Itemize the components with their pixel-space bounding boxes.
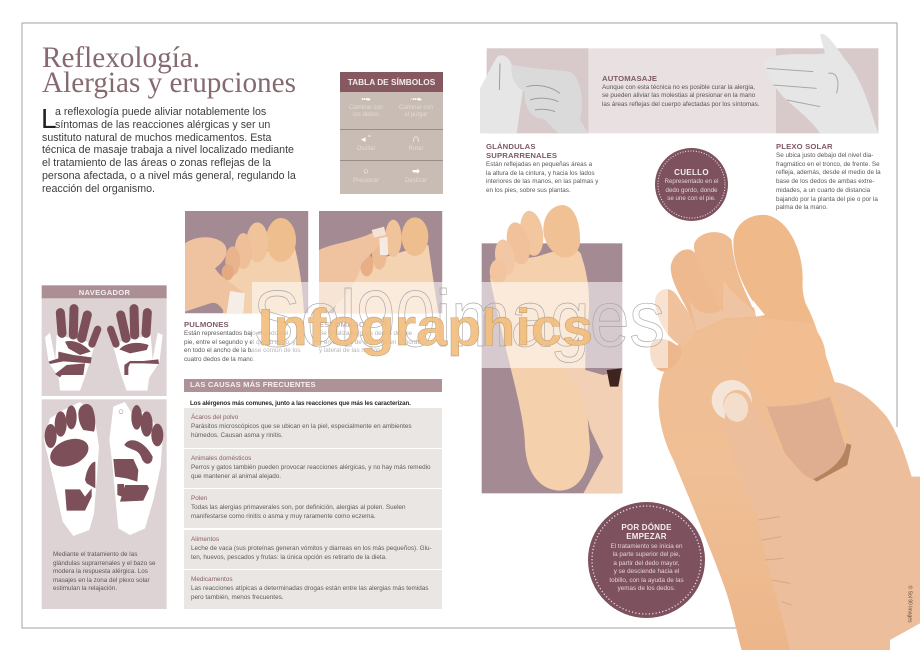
text: plexo solar: bajando por la planta del pie o por la <box>776 196 878 203</box>
symbol: presionar <box>353 166 379 184</box>
right foot map <box>109 402 163 535</box>
heading: causas: LAS CAUSAS MÁS FRECUENTES <box>190 380 316 389</box>
icon: open hand pressing palm <box>763 34 878 133</box>
symbol: caminar con los dedos: Caminar con <box>349 104 383 110</box>
intro text block: persona afectada, o a nivel más general, regulando la <box>42 170 296 182</box>
row: ácaros del polvo <box>184 408 442 448</box>
text: glándulas suprarrenales: interiores de las manos, en las palmas y <box>486 178 598 185</box>
text: pulmones: pie, entre el segundo y el quinto dedo, y <box>184 339 296 346</box>
left hand map <box>45 309 98 391</box>
text: plexo solar: midades, a un cuarto de distancia <box>776 187 870 194</box>
intro text block: el tratamiento de las áreas o zonas reflejas de la <box>42 157 271 169</box>
divider row <box>340 129 443 130</box>
panel: tabla de símbolos <box>340 72 443 194</box>
callout: por dónde empezar: yemas de los dedos. <box>618 585 675 592</box>
text: plexo solar <box>776 142 881 211</box>
symbol: presionar: ○ <box>363 166 369 176</box>
left foot map <box>44 402 99 536</box>
text: second column: y en la zona de la mano, en el borde <box>319 339 421 346</box>
row: medicamentos: pero también, menos frecuentes. <box>191 594 284 601</box>
symbol: caminar con el pulgar: Caminar con <box>399 104 433 110</box>
photo: massage toes 1 <box>185 211 308 313</box>
intro text block: sustituto natural de muchos medicamentos. Esta <box>42 132 271 144</box>
panel: automasaje <box>480 34 878 134</box>
title: Reflexología. <box>42 42 200 74</box>
intro text block: L <box>41 103 57 134</box>
row: polen: Polen <box>191 495 207 502</box>
title: Alergias y erupciones <box>42 67 296 99</box>
callout: por dónde empezar: El tratamiento se inicia en <box>610 542 683 550</box>
row: alimentos: Alimentos <box>191 536 219 542</box>
text: automasaje: se pueden aliviar las molestias al presionar en la mano <box>602 92 755 99</box>
text: automasaje: AUTOMASAJE <box>602 74 657 83</box>
divider row <box>340 160 443 161</box>
symbol: deslizar <box>405 166 427 184</box>
text: pulmones: PULMONES <box>184 320 229 329</box>
text: plexo solar: fragmático en el tronco, de frente. Se <box>776 161 880 168</box>
text: pulmones: cuatro dedos de la mano. <box>184 356 255 363</box>
text: glándulas suprarrenales: en los pies, sobre sus plantas. <box>486 187 571 194</box>
callout: por dónde empezar: y se desciende hacia el <box>614 568 679 575</box>
symbol: deslizar: Deslizar <box>405 178 427 184</box>
row: animales domésticos: que mantener al animal alejado. <box>191 473 281 480</box>
symbol: caminar con el pulgar <box>399 97 433 118</box>
navegador caption: modera la respuesta alérgica. Los <box>53 568 148 575</box>
text: second column: Se localiza bajo los dedos del pie <box>319 330 412 337</box>
text: automasaje <box>602 74 760 108</box>
callout: por dónde empezar: POR DÓNDE <box>621 523 672 532</box>
callout: cuello: Representado en el <box>664 178 718 185</box>
heading: tabla de símbolos <box>340 72 443 92</box>
row: medicamentos <box>184 570 442 609</box>
symbol: oscilar: ◂ ˜ <box>361 134 371 144</box>
row: alimentos: ten, huevos, pescados y frutas: la única opción es retirarlo de la dieta. <box>191 554 387 560</box>
intro text block: reacción del organismo. <box>42 182 155 194</box>
text: pulmones <box>184 320 301 363</box>
row: ácaros del polvo: húmedos. Causan asma y rinitis. <box>191 432 283 438</box>
row: polen: manifestarse como rinitis o asma y muy raramente como eczema. <box>191 513 376 520</box>
text: plexo solar: base de los dedos de ambas extre- <box>776 178 874 185</box>
icon: hand pinching finger <box>480 55 588 133</box>
symbol: oscilar <box>357 134 376 152</box>
text: pulmones: Están representados bajo el dedo del <box>184 330 288 337</box>
intro text block: síntomas de las reacciones alérgicas y ser un <box>55 119 270 131</box>
heading: causas <box>184 379 442 392</box>
callout: cuello: CUELLO <box>674 168 709 177</box>
navegador caption: glándulas suprarrenales y el bazo se <box>53 560 156 567</box>
callout: cuello: se une con el pie. <box>667 195 716 202</box>
callout: cuello <box>655 148 728 221</box>
text: glándulas suprarrenales: Están reflejadas en pequeñas áreas a <box>486 161 592 168</box>
text: automasaje: Aunque con esta técnica no es posible curar la alergia, <box>602 84 755 90</box>
navegador caption: estimulan la relajación. <box>53 585 117 592</box>
navegador caption: Mediante el tratamiento de las <box>53 551 137 558</box>
symbol: deslizar: ➡ <box>412 166 420 176</box>
text: plexo solar: palma de la mano. <box>776 204 828 211</box>
row: animales domésticos: Perros y gatos también pueden provocar reacciones alérgicas, y no hay más remedio <box>191 464 431 471</box>
text: plexo solar: refleja, además, desde el medio de la <box>776 169 881 176</box>
row: medicamentos: Las reacciones atípicas a determinadas drogas están entre las alergias más temidas <box>191 585 428 592</box>
watermark: Infographics <box>258 299 593 357</box>
foot <box>650 215 890 650</box>
photo: massage toes 2 <box>319 211 442 313</box>
hand <box>721 382 920 650</box>
row: alimentos <box>184 530 442 569</box>
heading: navegador: NAVEGADOR <box>79 288 130 297</box>
text: glándulas suprarrenales <box>486 142 598 194</box>
callout: por dónde empezar: la parte superior del pie, <box>613 551 680 558</box>
photos: foot massage <box>185 211 442 314</box>
intro text block <box>41 103 296 194</box>
panel: navegador <box>42 285 167 609</box>
panel: las causas más frecuentes <box>184 379 442 609</box>
text: automasaje: las áreas reflejas del cuerpo afectadas por los síntomas. <box>602 101 760 108</box>
text: plexo solar: Se ubica justo debajo del nivel dia- <box>776 152 873 159</box>
text: plexo solar: PLEXO SOLAR <box>776 142 833 151</box>
photo: big foot with thumb pressing <box>650 214 920 650</box>
symbol: caminar con los dedos: •••▸ <box>361 97 371 103</box>
row: animales domésticos: Animales domésticos <box>191 455 251 462</box>
callout: por dónde empezar: tobillo, con la ayuda de las <box>609 576 684 584</box>
right hand map <box>111 309 163 391</box>
text: second column: y lateral de las manos. <box>319 347 382 354</box>
intro text block: técnica de masaje trabaja a nivel localizado mediante <box>42 144 294 156</box>
heading: tabla de símbolos: TABLA DE SÍMBOLOS <box>348 77 435 87</box>
navegador caption: masajes en la zona del plexo solar <box>53 577 150 584</box>
text: second column <box>319 320 421 354</box>
title <box>42 42 296 99</box>
row: ácaros del polvo: Parásitos microscópicos que se ubican en la piel, especialmente en ambientes <box>191 422 412 430</box>
row: animales domésticos <box>184 449 442 488</box>
causes intro: Los alérgenos más comunes, junto a las reacciones que más les caracterizan. <box>190 400 411 406</box>
text: glándulas suprarrenales: la altura de la cintura, y hacia los lados <box>486 170 595 177</box>
symbol: caminar con los dedos <box>349 97 383 118</box>
row: polen: Todas las alergias primaverales son, por definición, alergias al polen. Suelen <box>191 504 406 511</box>
row: polen <box>184 489 442 528</box>
callout: por dónde empezar <box>588 502 705 618</box>
symbol: caminar con el pulgar: ◦•••▸ <box>410 97 422 103</box>
symbol: rotar: Rotar <box>409 146 423 152</box>
text: second column: ESTÓMAGO <box>319 320 365 329</box>
symbol: presionar: Presionar <box>353 178 379 184</box>
symbol: oscilar: Oscilar <box>357 146 375 152</box>
callout: por dónde empezar: a partir del dedo mayor, <box>613 560 680 566</box>
watermark: Sol90images <box>253 274 665 363</box>
navegador caption <box>53 551 156 592</box>
photo: foot sole with hand <box>482 205 622 494</box>
callout: cuello: dedo gordo, donde <box>666 187 717 194</box>
credit: © Sol 90 Images <box>906 586 912 623</box>
row: medicamentos: Medicamentos <box>191 576 233 583</box>
symbol: caminar con los dedos: los dedos <box>353 112 379 118</box>
row: alimentos: Leche de vaca (sus proteínas generan vómitos y diarreas en los más pequeños). Glu- <box>191 544 432 552</box>
text: pulmones: en todo el ancho de la base común de los <box>184 347 301 354</box>
symbol: rotar <box>409 133 424 152</box>
intro text block: a reflexología puede aliviar notablemente los <box>55 106 266 118</box>
text: glándulas suprarrenales: GLÁNDULAS <box>486 142 536 151</box>
row: ácaros del polvo: Ácaros del polvo <box>191 414 238 420</box>
symbol: rotar: ∩ <box>412 133 420 145</box>
symbol: caminar con el pulgar: el pulgar <box>404 112 428 118</box>
text: glándulas suprarrenales: SUPRARRENALES <box>486 151 557 160</box>
callout: por dónde empezar: EMPEZAR <box>626 532 667 541</box>
